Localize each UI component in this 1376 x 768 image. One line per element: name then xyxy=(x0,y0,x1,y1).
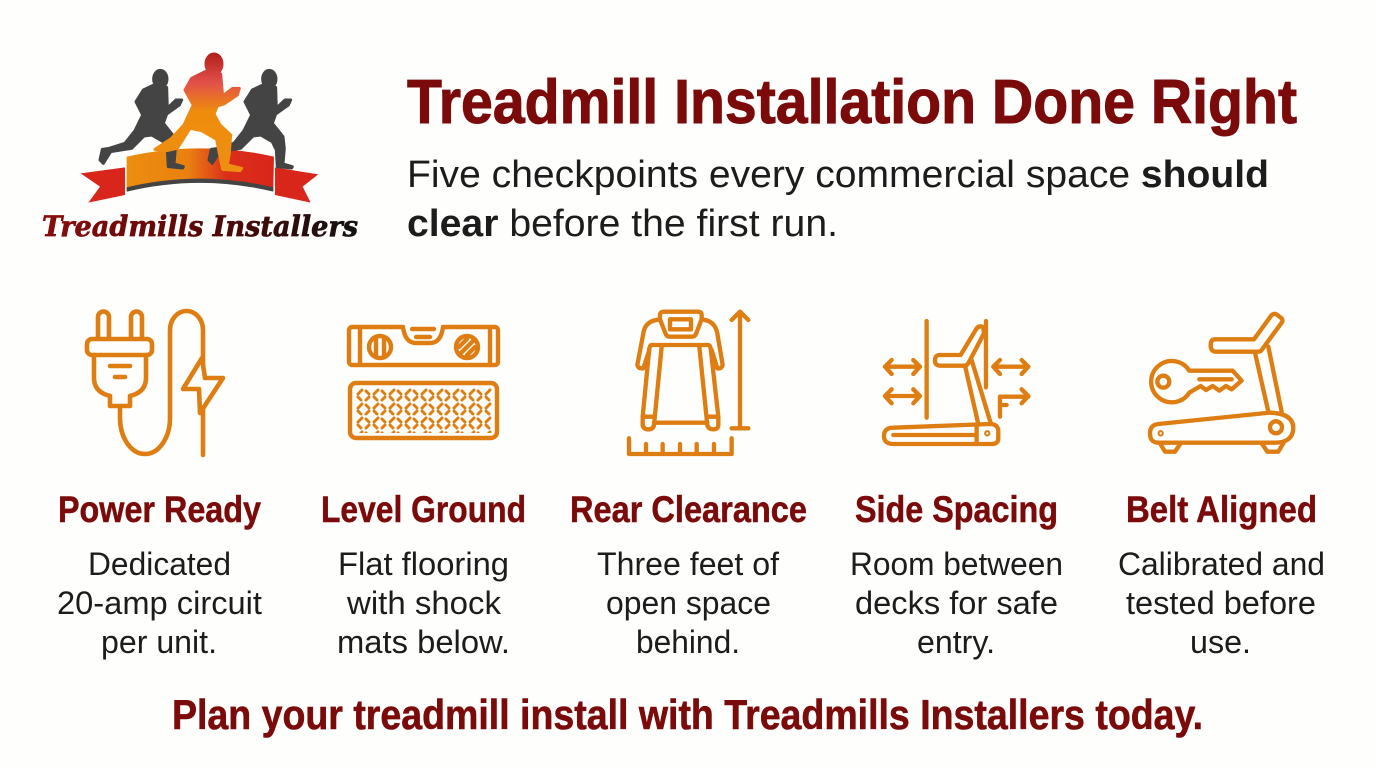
description: use. xyxy=(1190,624,1251,660)
description xyxy=(850,546,1063,660)
icon: key and treadmill xyxy=(1150,314,1293,452)
description: per unit. xyxy=(101,624,217,660)
ribbon left tail xyxy=(81,167,125,203)
icon: treadmill side view with spacing arrows xyxy=(884,321,1028,444)
description: Flat flooring xyxy=(338,546,509,582)
subtitle xyxy=(407,154,1269,245)
heading: Belt Aligned xyxy=(1126,489,1317,530)
icon: treadmill front view with measurements xyxy=(629,312,748,454)
description: behind. xyxy=(636,624,740,660)
ribbon centre xyxy=(127,148,274,191)
runner centre xyxy=(155,54,242,171)
description: decks for safe xyxy=(855,585,1058,621)
logo: Treadmills Installers xyxy=(42,54,358,243)
column: Power Ready xyxy=(57,311,262,660)
description: mats below. xyxy=(337,624,510,660)
icon: plug with lightning bolt xyxy=(87,311,223,455)
icon: runners and ribbon xyxy=(81,54,318,203)
ribbon right tail xyxy=(275,167,318,203)
description: Three feet of xyxy=(597,546,779,582)
column: Side Spacing xyxy=(850,321,1063,660)
ribbon shadow band xyxy=(127,179,273,192)
subtitle: Five checkpoints every commercial space should xyxy=(407,154,1269,196)
runner right xyxy=(209,70,292,168)
description xyxy=(337,546,510,660)
description xyxy=(57,546,262,660)
heading: Rear Clearance xyxy=(570,489,807,530)
description: with shock xyxy=(346,585,502,621)
description: open space xyxy=(606,585,771,621)
description xyxy=(597,546,779,660)
column: Rear Clearance xyxy=(570,312,807,660)
subtitle: clear before the first run. xyxy=(407,203,838,245)
description: Dedicated xyxy=(88,546,231,582)
column: Level Ground xyxy=(321,327,526,660)
logo wordmark: Treadmills Installers xyxy=(42,210,358,243)
runner left xyxy=(100,70,183,168)
call to action: Plan your treadmill install with Treadmills Installers today. xyxy=(172,691,1203,738)
icon: spirit level over shock mat xyxy=(349,327,498,438)
title: Treadmill Installation Done Right xyxy=(407,68,1297,137)
column: Belt Aligned xyxy=(1118,314,1325,660)
description: Room between xyxy=(850,546,1063,582)
heading: Power Ready xyxy=(58,489,261,530)
heading: Level Ground xyxy=(321,489,526,530)
description: Calibrated and xyxy=(1118,546,1325,582)
description: 20-amp circuit xyxy=(57,585,262,621)
heading: Side Spacing xyxy=(855,489,1058,530)
description: entry. xyxy=(917,624,995,660)
description xyxy=(1118,546,1325,660)
description: tested before xyxy=(1126,585,1316,621)
